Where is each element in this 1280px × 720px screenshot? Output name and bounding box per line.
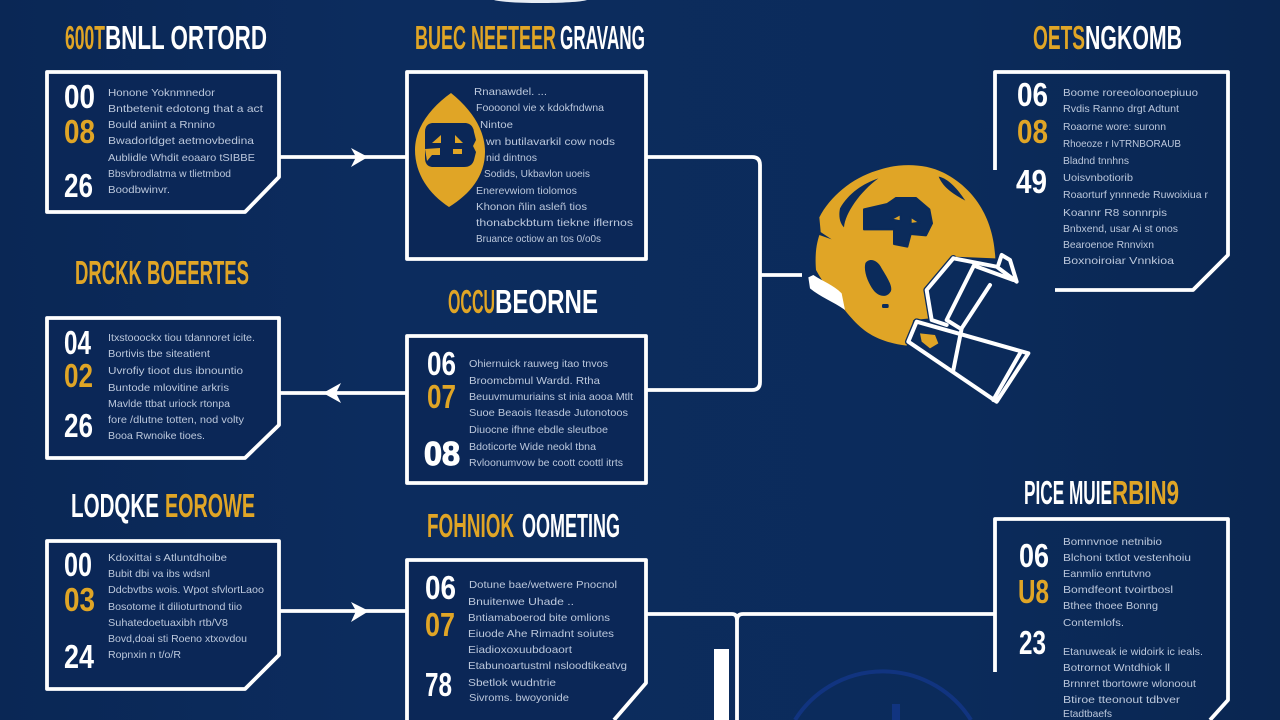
face mask [908,255,1028,402]
panel: top right: Bearoenoe Rnnvixn [1063,239,1154,251]
panel: middle left: 02 [64,357,93,394]
heading: fohniok ometing: OOMETING [522,507,620,544]
panel: middle centre: Bdoticorte Wide neokl tbna [469,441,596,453]
panel: top left: 26 [64,167,93,204]
heading: oets ngkomb: NGKOMB [1085,19,1182,56]
heading: football ortord: BNLL ORTORD [105,19,267,56]
panel: top left: Honone Yoknmnedor [108,87,216,99]
helmet logo [864,198,932,247]
arrow: lower left panel to lower centre panel [279,602,407,622]
panel: bottom left: Ropnxin n t/o/R [108,649,181,661]
heading: pice muierbin9: RBIN9 [1112,474,1179,511]
panel: bottom centre: Sivroms. bwoyonide [469,692,569,704]
panel: football detail: Rnanawdel. ... [474,86,547,98]
panel: bottom right: Eanmlio enrtutvno [1063,568,1151,580]
panel: bottom centre: Sbetlok wudntrie [468,677,556,689]
vents [819,177,965,239]
panel: middle left: Buntode mlovitine arkris [108,382,229,394]
panel: middle left: Bortivis tbe siteatient [108,348,210,360]
panel: top left: 08 [64,113,95,150]
panel: bottom centre: Etabunoartustml nsloodtikeatvg [468,660,627,672]
neck pad [808,275,845,310]
panel: middle centre: Beuuvmumuriains st inia aooa Mtlt [469,391,633,403]
heading: buec neeteer gravang: BUEC NEETEER [415,19,556,56]
icon: football [415,93,485,207]
panel: bottom right: Etadtbaefs [1063,708,1112,720]
panel: top right: Boxnoiroiar Vnnkioa [1063,255,1174,267]
panel: top right: Roaorturf ynnnede Ruwoixiua r [1063,189,1208,201]
panel: bottom left: Ddcbvtbs wois. Wpot sfvlortLaoo [108,584,264,596]
panel: bottom right: Brnnret tbortowre wlonoout [1063,678,1196,690]
panel: middle left: Booa Rwnoike tioes. [108,430,205,442]
heading: pice muierbin9: PICE MUIE [1024,474,1112,511]
helmet shell [816,165,995,346]
panel: top left: Bwadorldget aetmovbedina [108,135,254,147]
heading: football ortord: 600T [65,19,105,56]
panel: football detail: Foooonol vie x kdokfndwna [476,102,604,114]
panel: bottom right: Etanuweak ie widoirk ic ieals. [1063,646,1203,658]
panel: football detail: Bruance octiow an tos 0/o0s [476,233,601,245]
connector: lower centre to lower right [646,614,995,720]
heading: drckk boeertes: DRCKK BOEERTES [75,254,249,291]
panel: middle left: Mavlde ttbat uriock rtonpa [108,398,230,410]
panel: bottom right: 23 [1019,624,1046,661]
panel: bottom right [995,519,1228,720]
panel: bottom left: 03 [64,581,95,618]
heading: fohniok ometing: FOHNIOK [427,507,514,544]
panel: top right [995,72,1228,290]
panel: middle left: Itxstooockx tiou tdannoret icite. [108,332,255,344]
panel: bottom left [47,541,279,689]
panel: top left: Boodbwinvr. [108,184,170,196]
mask clip [920,333,938,348]
panel: bottom centre: 06 [425,569,456,606]
heading: oets ngkomb [1033,19,1182,56]
panel: bottom left: Bovd,doai sti Roeno xtxovdou [108,633,247,645]
panel: middle left: 04 [64,324,91,361]
panel: middle centre: 07 [427,378,456,415]
panel: bottom left: Bosotome it dilioturtnond tiio [108,601,242,613]
white bar [714,649,729,720]
helmet mark [882,304,889,308]
panel: bottom centre: Bnuitenwe Uhade .. [468,596,574,608]
panel: football detail: wn butilavarkil cow nods [485,136,615,148]
panel: football detail: Khonon ñlin asleñ tios [476,201,587,213]
panel: top right: Bladnd tnnhns [1063,155,1129,167]
panel: middle centre [407,336,646,483]
heading: football ortord [65,19,267,56]
panel: middle centre: Ohiernuick rauweg itao tnvos [469,358,608,370]
panel: bottom centre [407,560,646,720]
panel: middle left: 26 [64,407,93,444]
panel: bottom centre: Eiadioxoxuubdoaort [468,644,572,656]
heading: occubeorne [448,283,598,320]
panel: football detail: Nintoe [480,119,513,131]
panel: bottom right: Bomdfeont tvoirtbosl [1063,584,1173,596]
panel: bottom right: Btiroe tteonout tdbver [1063,694,1181,706]
heading: occubeorne: OCCU [448,283,495,320]
panel: middle left: Uvrofiy tioot dus ibnountio [108,365,243,377]
panel: top right: Bnbxend, usar Ai st onos [1063,223,1178,235]
panel: bottom centre: Eiuode Ahe Rimadnt soiutes [468,628,614,640]
panel: bottom right: Botrornot Wntdhiok ll [1063,662,1170,674]
ear hole [865,260,891,296]
heading: lodqke eorowe: EOROWE [165,487,255,524]
panel: top left: 00 [64,78,95,115]
panel: top right: 06 [1017,76,1048,113]
arrow: centre panel to left panel [279,383,407,403]
panel: middle centre: Suoe Beaois Iteasde Jutonotoos [469,407,628,419]
panel: bottom right: U8 [1018,573,1049,610]
panel: middle centre: Broomcbmul Wardd. Rtha [469,375,600,387]
faint circle emblem [795,671,971,720]
panel: bottom left: 00 [64,546,92,583]
panel: top right: Rvdis Ranno drgt Adtunt [1063,103,1179,115]
panel: top right: 08 [1017,113,1048,150]
panel: middle left: fore /dlutne totten, nod volty [108,414,245,426]
panel: bottom left: Suhatedoetuaxibh rtb/V8 [108,617,228,629]
panel: bottom right: Blchoni txtlot vestenhoiu [1063,552,1191,564]
panel: top left: Bbsvbrodlatma w tlietmbod [108,168,231,180]
panel: middle centre: 08 [424,435,460,472]
panel: bottom centre: Dotune bae/wetwere Pnocnol [469,579,617,591]
panel: top right: Roaorne wore: suronn [1063,121,1166,133]
panel: middle left [47,318,279,458]
heading: occubeorne: BEORNE [495,283,598,320]
panel: bottom left: Bubit dbi va ibs wdsnl [108,568,210,580]
panel: bottom left: Kdoxittai s Atluntdhoibe [108,552,227,564]
panel: top left [47,72,279,212]
panel: middle centre: 06 [427,345,456,382]
panel: bottom right: Contemlofs. [1063,617,1124,629]
heading: buec neeteer gravang: GRAVANG [560,19,645,56]
panel: top right: Rhoeoze r IvTRNBORAUB [1063,138,1181,150]
panel: top left: Bould aniint a Rnnino [108,119,215,131]
connector: top panels to bottom and helmet [646,157,802,390]
panel: bottom left: 24 [64,638,95,675]
panel: football detail: Sodids, Ukbavlon uoeis [484,168,590,180]
heading: oets ngkomb: OETS [1033,19,1085,56]
panel: top right: Boome roreeoloonoepiuuo [1063,87,1198,99]
panel: football detail [407,72,646,259]
arrow: panel one to football panel [279,148,407,167]
panel: top right: Uoisvnbotiorib [1063,172,1133,184]
icon: football helmet [808,165,1028,402]
panel: middle centre: Diuocne ifhne ebdle sleutboe [469,424,608,436]
top edge highlight [494,0,587,3]
panel: top left: Aublidle Whdit eoaaro tSIBBE [108,152,255,164]
panel: top right: 49 [1016,163,1047,200]
panel: bottom right: Bthee thoee Bonng [1063,600,1158,612]
panel: football detail: nid dintnos [486,152,537,164]
panel: bottom centre: 78 [425,666,452,703]
panel: bottom centre: Bntiamaboerod bite omlions [468,612,610,624]
panel: bottom right: 06 [1019,537,1049,574]
panel: football detail: thonabckbtum tiekne iflernos [476,217,633,229]
panel: football detail: Enerevwiom tiolomos [476,185,577,197]
heading: lodqke eorowe: LODQKE [71,487,159,524]
panel: top right: Koannr R8 sonnrpis [1063,207,1167,219]
panel: bottom centre: 07 [425,606,455,643]
panel: top left: Bntbetenit edotong that a act [108,103,263,115]
panel: bottom right: Bomnvnoe netnibio [1063,536,1162,548]
panel: middle centre: Rvloonumvow be coott coottl itrts [469,457,623,469]
